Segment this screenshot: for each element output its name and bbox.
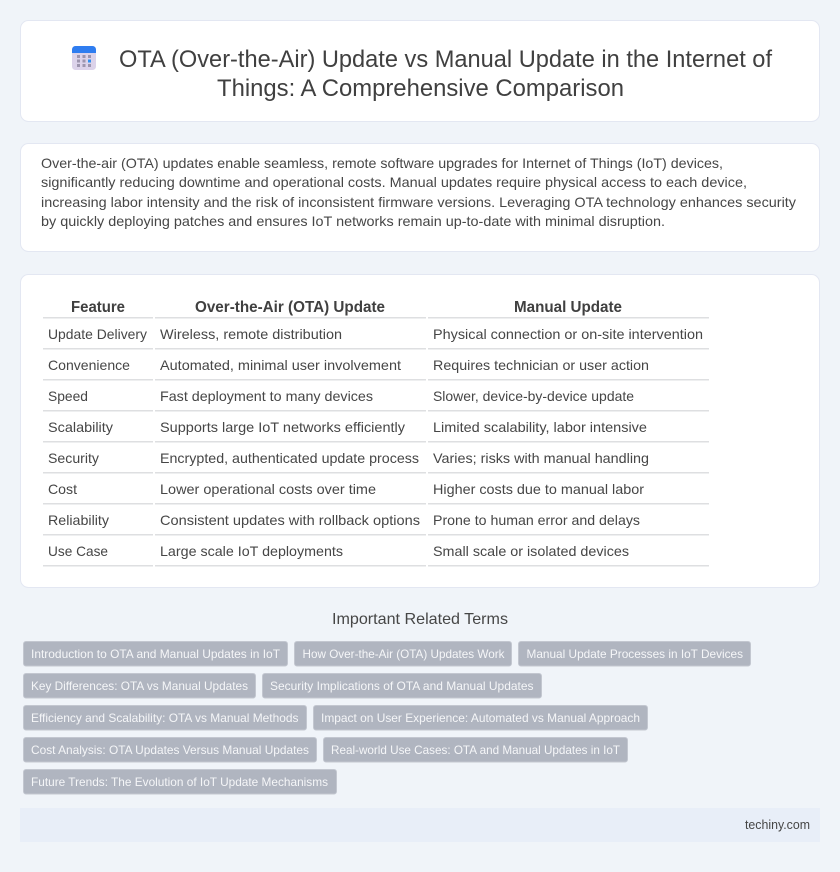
row: speed: Fast deployment to many devices <box>160 388 373 404</box>
row: update delivery: Wireless, remote distribution <box>160 326 342 342</box>
tag: how OTA works: How Over-the-Air (OTA) Updates Work <box>302 647 505 661</box>
row: reliability: Prone to human error and delays <box>433 512 640 528</box>
row: speed: Slower, device-by-device update <box>433 388 634 404</box>
row: cost: Cost <box>48 481 77 497</box>
panel: introduction text: Over-the-air (OTA) updates enable seamless, remote software upgrades for Internet of Things (IoT) devices, <box>41 155 723 171</box>
title: Things: A Comprehensive Comparison <box>217 75 624 102</box>
row: reliability: Consistent updates with rollback options <box>160 512 420 528</box>
panel: introduction text: by quickly deploying patches and ensures IoT networks remain up-to-date with minimal disruption. <box>41 213 665 229</box>
related term tags <box>24 642 750 794</box>
icon: calendar <box>72 46 96 70</box>
footer: techiny.com <box>745 818 810 832</box>
table header row <box>71 299 622 316</box>
tag: future trends: Future Trends: The Evolution of IoT Update Mechanisms <box>31 775 328 789</box>
panel: introduction text: increasing labor intensity and the risk of inconsistent firmware versions. Leveraging OTA technology enhances security <box>41 194 796 210</box>
tag: cost analysis: Cost Analysis: OTA Updates Versus Manual Updates <box>31 743 309 757</box>
tag: user experience <box>314 706 648 730</box>
row: cost: Lower operational costs over time <box>160 481 376 497</box>
tag: use cases <box>324 738 628 762</box>
row: use case: Use Case <box>48 543 108 559</box>
row: cost: Higher costs due to manual labor <box>433 481 644 497</box>
row: update delivery <box>48 326 703 342</box>
panel: introduction text: significantly reducing downtime and operational costs. Manual updates require physical access to each device, <box>41 174 747 190</box>
row: use case <box>48 543 629 559</box>
title <box>119 46 772 102</box>
tag: introduction <box>24 642 288 666</box>
row: speed: Speed <box>48 388 88 404</box>
tag: cost analysis <box>24 738 316 762</box>
table header row: Feature <box>71 299 125 316</box>
panel: title header <box>20 20 820 122</box>
row: update delivery: Update Delivery <box>48 326 147 342</box>
row: reliability: Reliability <box>48 512 109 528</box>
row: cost <box>48 481 644 497</box>
row: convenience: Convenience <box>48 357 130 373</box>
tag: future trends <box>24 770 336 794</box>
table header row: Manual Update <box>514 299 622 316</box>
tag: security implications: Security Implications of OTA and Manual Updates <box>270 679 534 693</box>
row: speed <box>48 388 634 404</box>
row: update delivery: Physical connection or on-site intervention <box>433 326 703 342</box>
tag: manual processes <box>518 642 750 666</box>
row: security: Encrypted, authenticated update process <box>160 450 419 466</box>
row: scalability: Scalability <box>48 419 113 435</box>
row: use case: Large scale IoT deployments <box>160 543 343 559</box>
row: convenience <box>48 357 649 373</box>
row: scalability: Limited scalability, labor intensive <box>433 419 647 435</box>
panel: comparison table <box>20 274 820 588</box>
row: security: Varies; risks with manual handling <box>433 450 649 466</box>
row: convenience: Automated, minimal user involvement <box>160 357 401 373</box>
row: scalability: Supports large IoT networks efficiently <box>160 419 405 435</box>
tag: manual processes: Manual Update Processes in IoT Devices <box>526 647 743 661</box>
row: reliability <box>48 512 640 528</box>
heading: important related terms: Important Related Terms <box>332 611 508 628</box>
table header row: Over-the-Air (OTA) Update <box>195 299 385 316</box>
row: security: Security <box>48 450 99 466</box>
title: OTA (Over-the-Air) Update vs Manual Update in the Internet of <box>119 46 772 73</box>
row: scalability <box>48 419 647 435</box>
table rules <box>43 317 709 566</box>
panel: introduction text <box>20 144 820 252</box>
tag: introduction: Introduction to OTA and Manual Updates in IoT <box>31 647 281 661</box>
tag: how OTA works <box>294 642 512 666</box>
tag: use cases: Real-world Use Cases: OTA and Manual Updates in IoT <box>331 743 621 757</box>
tag: key differences <box>24 674 256 698</box>
tag: key differences: Key Differences: OTA vs Manual Updates <box>31 679 248 693</box>
row: use case: Small scale or isolated devices <box>433 543 629 559</box>
row: convenience: Requires technician or user action <box>433 357 649 373</box>
tag: efficiency <box>24 706 306 730</box>
row: security <box>48 450 649 466</box>
footer <box>20 808 820 842</box>
tag: efficiency: Efficiency and Scalability: OTA vs Manual Methods <box>31 711 298 725</box>
tag: security implications <box>262 674 542 698</box>
tag: user experience: Impact on User Experience: Automated vs Manual Approach <box>321 711 640 725</box>
